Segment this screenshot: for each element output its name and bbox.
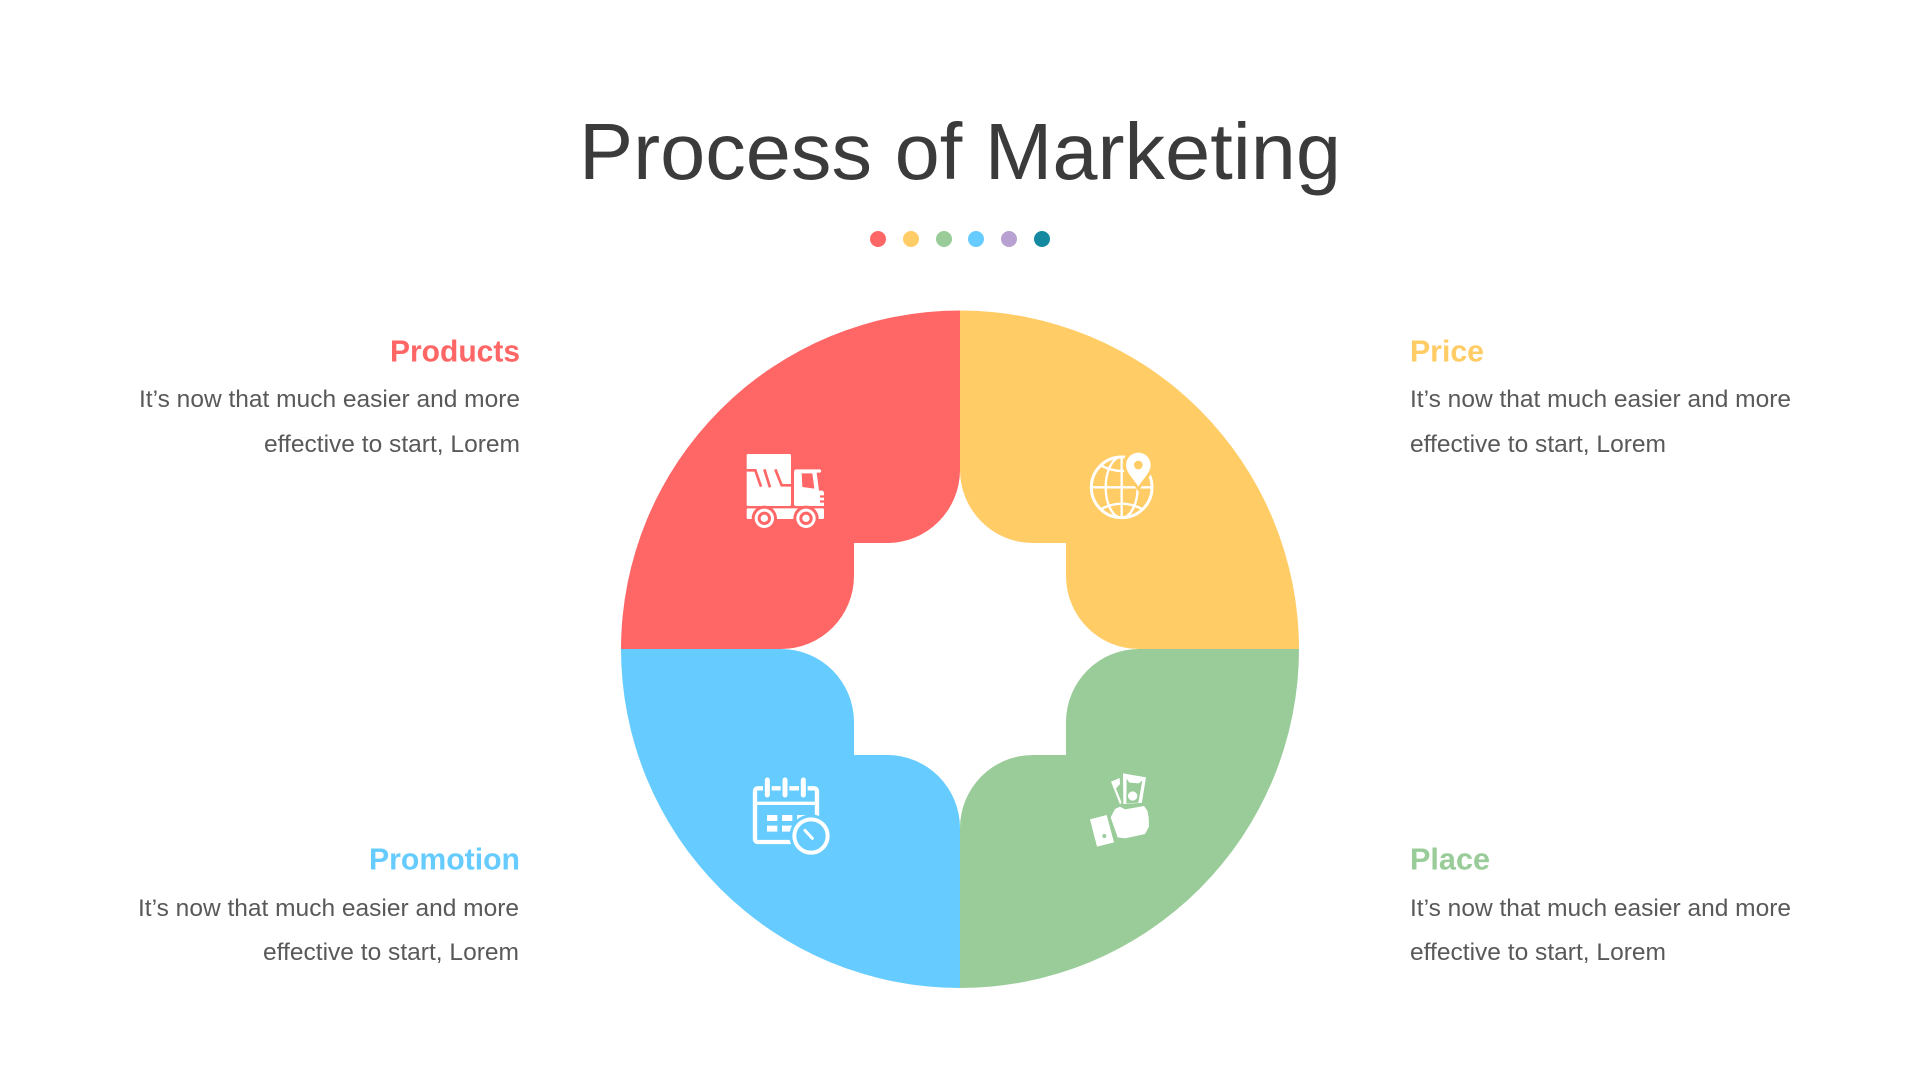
description: promotion: It’s now that much easier and more (138, 895, 519, 922)
description: products: It’s now that much easier and more (139, 386, 520, 413)
description: place (1410, 895, 1791, 966)
description: place: It’s now that much easier and more (1410, 895, 1791, 922)
icon: hand holding cash (1090, 773, 1150, 847)
heading: promotion: Promotion (369, 842, 520, 876)
icon: globe with location pin (1091, 449, 1154, 518)
heading: price: Price (1410, 334, 1484, 368)
panel: products text (139, 334, 520, 458)
title: Process of Marketing (579, 107, 1341, 196)
description: price: effective to start, Lorem (1410, 431, 1666, 458)
description: price: It’s now that much easier and more (1410, 386, 1791, 413)
icon: calendar with clock (755, 780, 833, 858)
panel: promotion text (138, 842, 520, 966)
icon: truck (747, 454, 825, 531)
description: products (139, 386, 520, 458)
decorative colour dots row (870, 231, 1050, 247)
segment: products (621, 310, 960, 649)
segment: promotion (621, 649, 960, 988)
description: price (1410, 386, 1791, 458)
description: promotion: effective to start, Lorem (263, 939, 519, 966)
segment: price (960, 310, 1299, 649)
panel: price text (1410, 334, 1791, 458)
heading: place: Place (1410, 842, 1490, 876)
heading: products: Products (390, 334, 520, 368)
description: place: effective to start, Lorem (1410, 939, 1666, 966)
description: products: effective to start, Lorem (264, 431, 520, 458)
description: promotion (138, 895, 519, 966)
panel: place text (1410, 842, 1791, 966)
segment: place (960, 649, 1299, 988)
circular diagram (621, 310, 1299, 988)
